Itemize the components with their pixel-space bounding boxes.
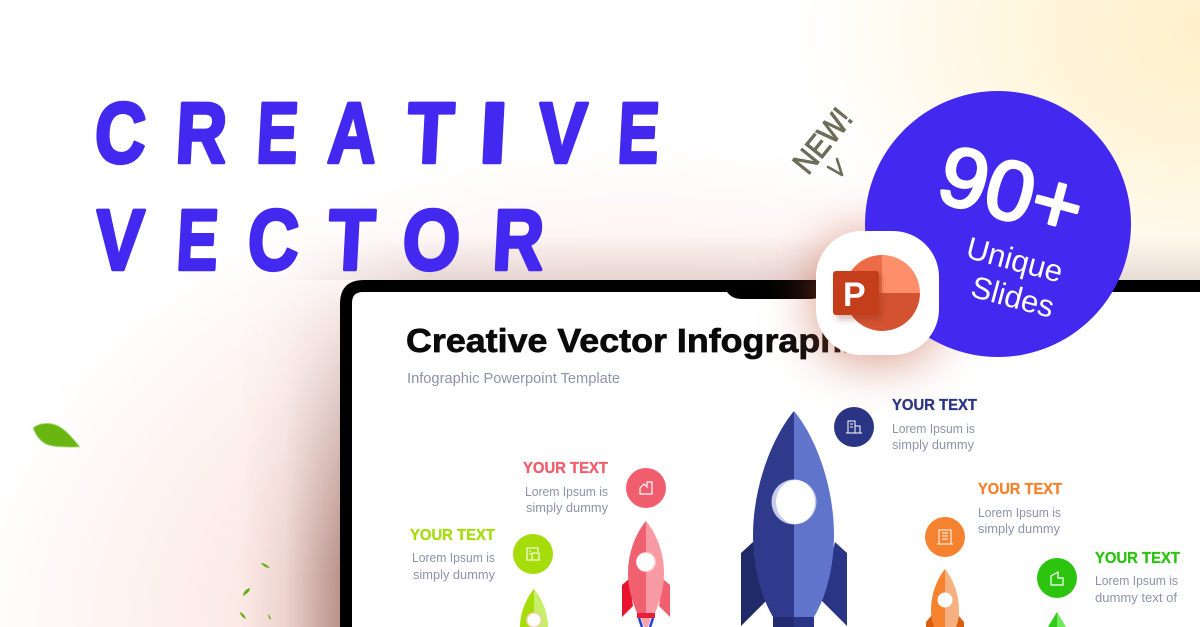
title: CREATIVE VECTOR: T	[326, 193, 377, 289]
laptop shadow on top edge	[317, 246, 1200, 280]
title: CREATIVE VECTOR: E	[254, 85, 301, 181]
item: green	[1037, 550, 1181, 605]
title: CREATIVE VECTOR: V	[93, 192, 146, 288]
item: orange: YOUR TEXT	[978, 481, 1063, 498]
item: lime: YOUR TEXT	[410, 527, 496, 544]
title: CREATIVE VECTOR: E	[174, 192, 221, 288]
laptop shadow on left edge	[260, 294, 340, 627]
item: lime	[410, 527, 553, 582]
red rocket	[622, 521, 670, 627]
badge: 90+ Unique Slides: Slides	[967, 269, 1058, 325]
slide subtitle: Infographic Powerpoint Template	[407, 371, 620, 387]
title: CREATIVE VECTOR: R	[491, 192, 547, 288]
badge: 90+ Unique Slides: 90+	[929, 127, 1094, 255]
item: lime: simply dummy	[413, 567, 495, 582]
item: lime: Lorem Ipsum is	[412, 550, 495, 565]
item: orange	[925, 481, 1063, 557]
green rocket	[1048, 612, 1066, 627]
item: red: simply dummy	[526, 500, 608, 515]
laptop frame	[340, 280, 1200, 627]
item: orange: Lorem Ipsum is	[978, 505, 1061, 520]
leaf: large green	[33, 423, 80, 447]
orange rocket	[926, 569, 964, 627]
item: orange: simply dummy	[978, 521, 1060, 536]
item: navy: simply dummy	[892, 437, 974, 452]
item: navy: YOUR TEXT	[892, 397, 978, 414]
title: CREATIVE VECTOR: A	[326, 86, 379, 181]
item: green: YOUR TEXT	[1095, 550, 1181, 567]
title: CREATIVE VECTOR: I	[477, 86, 510, 182]
arrow: down to badge	[828, 159, 842, 175]
icon: PowerPoint logo	[816, 231, 939, 355]
title: CREATIVE VECTOR: E	[615, 85, 662, 181]
item: green: dummy text of	[1095, 590, 1177, 605]
item: red: Lorem Ipsum is	[525, 484, 608, 499]
title: CREATIVE VECTOR: R	[174, 85, 230, 181]
title: CREATIVE VECTOR: V	[536, 85, 589, 181]
icon shadow	[816, 231, 939, 355]
title: CREATIVE VECTOR: C	[246, 192, 302, 288]
new label: NEW!	[785, 101, 859, 180]
title: CREATIVE VECTOR: T	[405, 86, 456, 182]
icon: PowerPoint logo: P	[843, 276, 866, 314]
item: red: YOUR TEXT	[523, 460, 609, 477]
item: navy: Lorem Ipsum is	[892, 421, 975, 436]
title: CREATIVE VECTOR: C	[93, 85, 149, 181]
title: CREATIVE VECTOR: O	[400, 192, 463, 289]
item: navy	[834, 397, 978, 452]
title: CREATIVE VECTOR	[93, 85, 662, 289]
badge: 90+ Unique Slides: Unique	[963, 230, 1067, 289]
lime rocket	[520, 589, 548, 627]
item: red	[523, 460, 666, 515]
item: green: Lorem Ipsum is	[1095, 573, 1178, 588]
leaves: small green	[240, 563, 271, 620]
badge: 90+ Unique Slides	[865, 91, 1131, 357]
big navy rocket	[741, 411, 847, 627]
slide title: Creative Vector Infographic	[406, 322, 872, 359]
laptop screen	[352, 292, 1200, 627]
